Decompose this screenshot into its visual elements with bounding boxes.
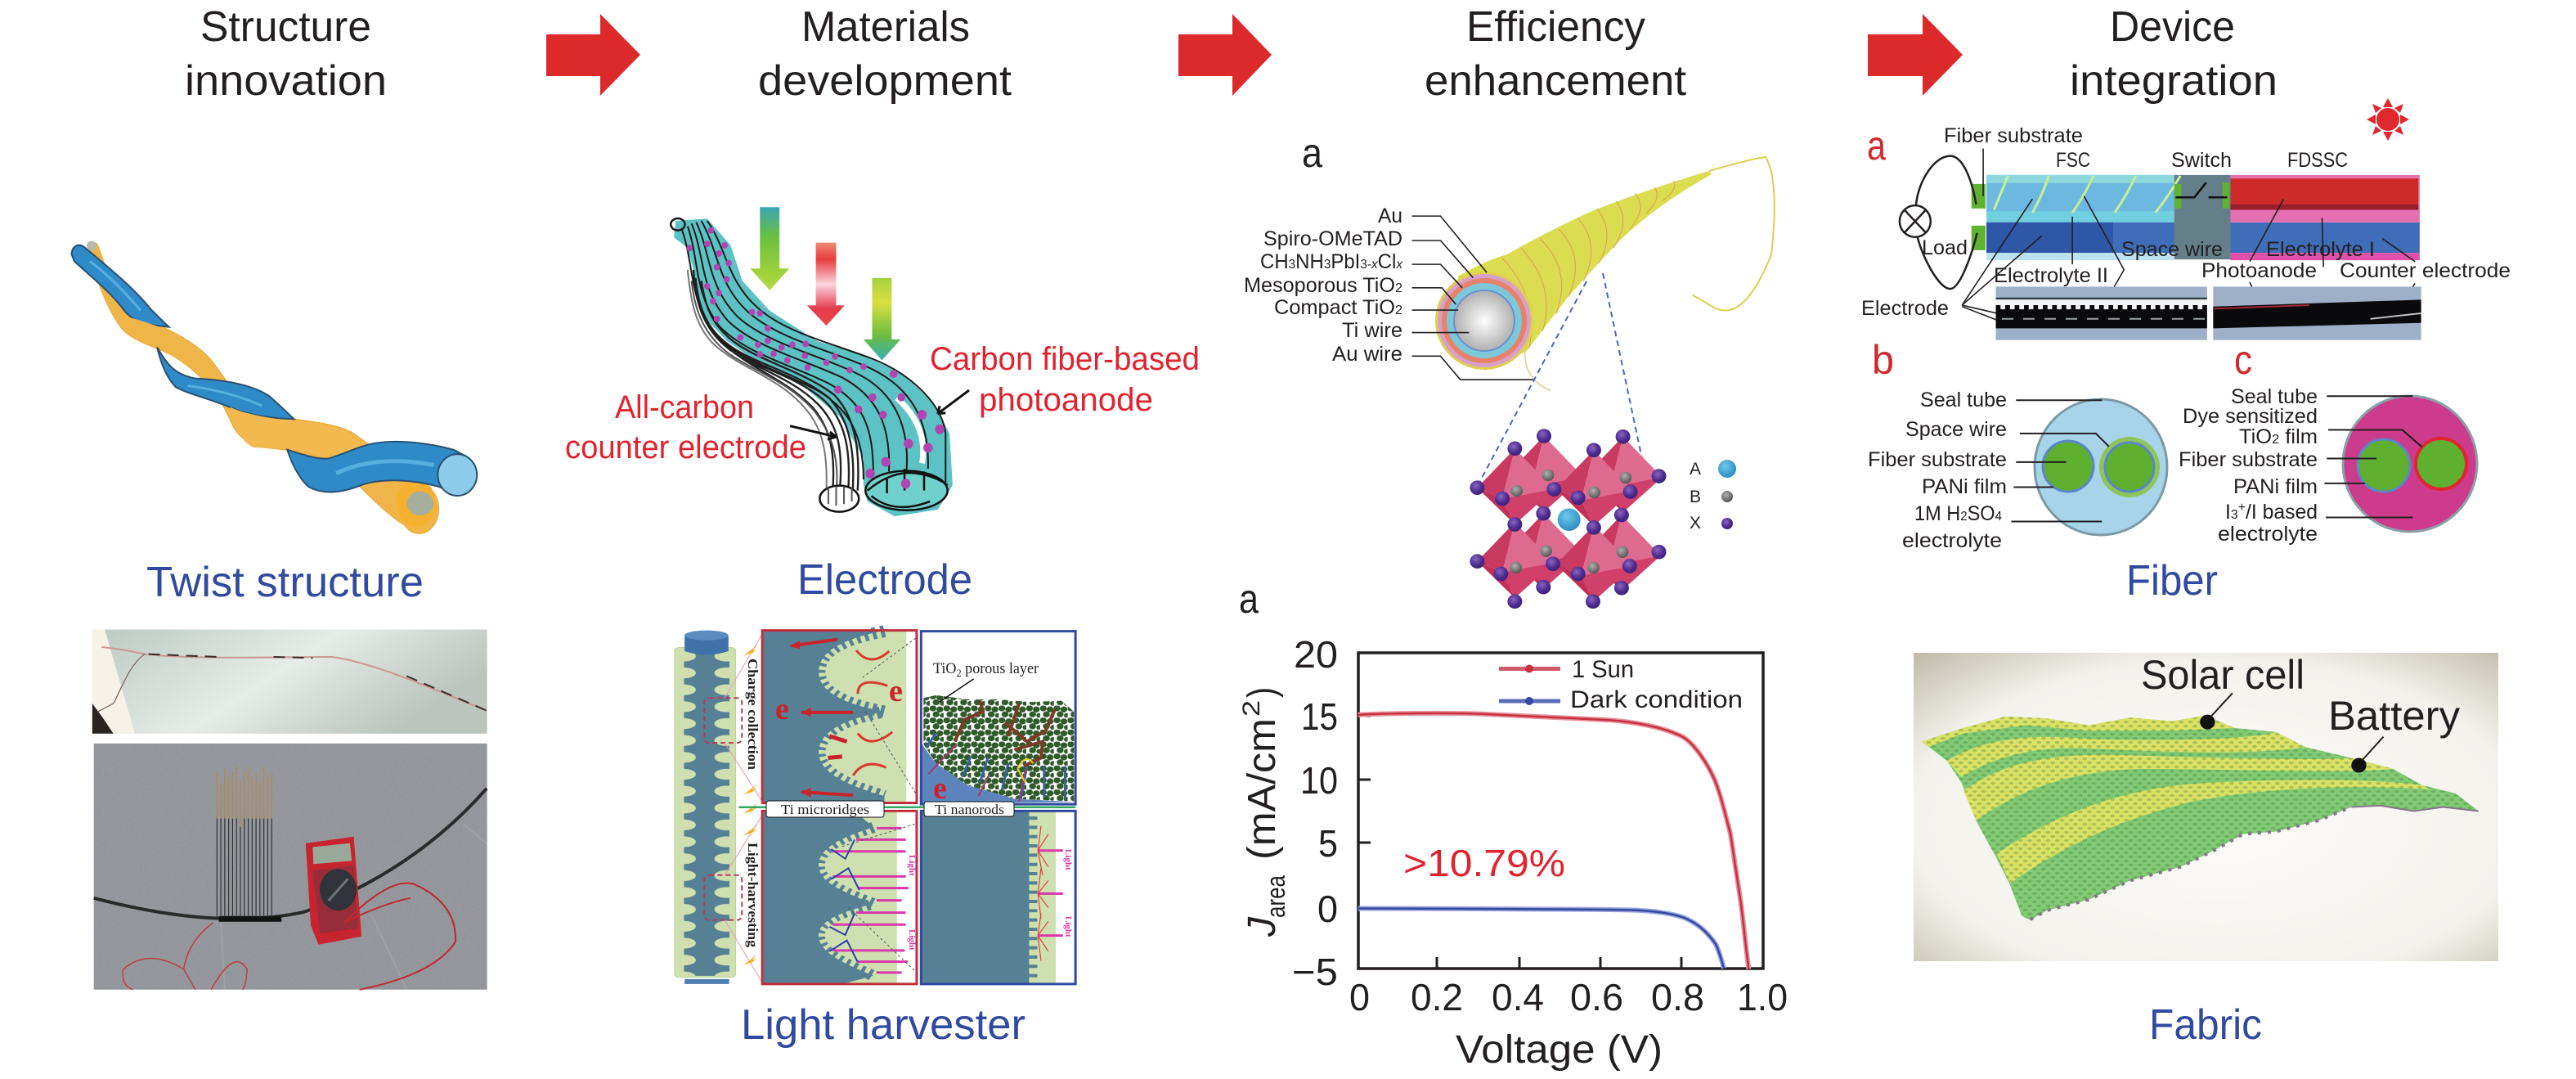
- heading: Efficiency enhancement: enhancement: [1425, 57, 1687, 105]
- labels: fiber layers: Au wire: [1332, 343, 1402, 366]
- illustration: carbon fiber electrode: [671, 207, 969, 516]
- inset: TiO2 porous layer at nanorods: [921, 632, 1075, 804]
- icon: green light arrow: [750, 207, 789, 290]
- label: Charge collection: Charge collection: [745, 659, 761, 771]
- x axis tick labels: 0.2: [1411, 976, 1463, 1018]
- light labels: Light: [1063, 849, 1073, 870]
- x axis tick labels: 0.6: [1570, 976, 1623, 1018]
- icon: switch: [2175, 182, 2228, 197]
- legend: crystal sites: B: [1690, 488, 1701, 506]
- callout: All-carbon counter electrode: [565, 389, 806, 465]
- label: Light harvester: Light harvester: [741, 1001, 1025, 1049]
- efficiency callout: >10.79%: [1403, 842, 1565, 884]
- callout: Carbon fiber-based photoanode: Carbon fiber-based: [930, 341, 1200, 377]
- electron labels: [775, 674, 947, 806]
- panel: perovskite fiber: [1244, 130, 1775, 609]
- label box: Ti microridges: Ti microridges: [781, 802, 869, 817]
- label: Fiber: Fiber: [2126, 557, 2218, 605]
- photo: FSC fiber: [1996, 286, 2207, 340]
- curve: dark condition: [1358, 908, 1724, 969]
- panel: fiber device: [1861, 98, 2511, 605]
- y axis title: [1238, 687, 1290, 937]
- label: Twist structure: Twist structure: [146, 559, 424, 606]
- labels: device parts: Electrolyte I: [2266, 238, 2375, 261]
- labels: device parts: FSC: [2056, 149, 2090, 172]
- y axis tick labels: 10: [1300, 759, 1338, 802]
- panel c: FDSSC cross-section: Seal tube: [2231, 385, 2318, 408]
- labels: fiber layers: Mesoporous TiO2: [1244, 274, 1402, 297]
- heading: Structure innovation: [185, 3, 387, 105]
- legend: Dark condition: [1499, 686, 1743, 713]
- x axis title: Voltage (V): [1456, 1028, 1663, 1072]
- photo: fiber array with multimeter: [94, 744, 487, 990]
- labels: fiber layers: Au: [1378, 205, 1402, 227]
- panel c: FDSSC cross-section: PANi film: [2233, 475, 2318, 498]
- panel b: FSC cross-section: Seal tube: [1920, 389, 2007, 411]
- labels: device parts: Load: [1922, 236, 1968, 259]
- heading: Materials development: Materials: [801, 3, 970, 51]
- heading: Device integration: Device: [2110, 3, 2235, 51]
- panel c: FDSSC cross-section: c: [2234, 337, 2252, 383]
- legend: crystal sites: [1690, 460, 1736, 533]
- panel b: FSC cross-section: Fiber substrate: [1868, 448, 2007, 471]
- photo: FDSSC fiber: [2213, 286, 2421, 340]
- labels: device parts: FDSSC: [2287, 149, 2348, 172]
- y axis tick labels: 0: [1317, 888, 1338, 930]
- y axis tick labels: 5: [1318, 822, 1338, 865]
- illustration: FSC and FDSSC integrated device: [1900, 149, 2421, 340]
- heading: Efficiency enhancement: Efficiency: [1466, 3, 1645, 51]
- y axis title: (mA/cm: [1241, 718, 1284, 860]
- panel b: FSC cross-section: Space wire: [1905, 418, 2007, 441]
- load circuit with lamp: [1900, 156, 1977, 289]
- panel b: FSC cross-section: 1M H2SO4: [1914, 502, 2002, 525]
- labels: fiber layers: Ti wire: [1342, 319, 1402, 342]
- arrow: materials to efficiency: [1178, 14, 1272, 96]
- panel letter a: a: [1239, 576, 1259, 622]
- legend: Dark condition: Dark condition: [1570, 686, 1743, 713]
- heading: Structure innovation: Structure: [200, 3, 371, 51]
- y axis title: 2: [1238, 700, 1265, 717]
- label: TiO2 porous layer: porous layer: [962, 660, 1039, 677]
- legend: 1 Sun: 1 Sun: [1572, 656, 1634, 683]
- curve: 1 Sun: [1358, 713, 1748, 969]
- chart frame and ticks: [1358, 653, 1763, 969]
- electron labels: e: [889, 674, 903, 708]
- y axis tick labels: 20: [1294, 633, 1338, 676]
- labels: fiber layers: Spiro-OMeTAD: [1263, 227, 1402, 250]
- inset: light harvesting at microridges: [762, 811, 917, 984]
- x axis tick labels: 0.4: [1492, 976, 1544, 1018]
- heading: Device integration: integration: [2070, 57, 2278, 105]
- panel: fabric: [1914, 652, 2498, 1049]
- illustration: woven fabric with stripes: [1922, 693, 2479, 920]
- light labels: Light: [907, 855, 917, 876]
- panel c: FDSSC cross-section: [2179, 337, 2477, 546]
- arrow: efficiency to device: [1868, 14, 1963, 96]
- panel b: FSC cross-section: b: [1872, 337, 1894, 383]
- panel background: [1914, 653, 2498, 961]
- heading: Efficiency enhancement: [1425, 3, 1687, 105]
- labels: device parts: Space wire: [2121, 238, 2223, 261]
- panel c: FDSSC cross-section: /I based: [2246, 501, 2318, 524]
- arrow: structure to materials: [546, 14, 640, 96]
- panel c: FDSSC cross-section: Fiber substrate: [2179, 448, 2318, 471]
- arrow: photoanode pointer: [938, 390, 969, 414]
- y axis tick labels: 15: [1301, 695, 1338, 738]
- x axis tick labels: 0.8: [1651, 976, 1704, 1018]
- labels: device parts: Electrode: [1861, 297, 1949, 320]
- panel c: FDSSC cross-section: electrolyte: [2218, 523, 2318, 546]
- y axis tick labels: [1292, 633, 1338, 993]
- inset: light harvesting at nanorods: [921, 811, 1075, 984]
- panel b: FSC cross-section: PANi film: [1922, 475, 2007, 498]
- panel c: FDSSC cross-section: +: [2238, 501, 2246, 515]
- electron labels: e: [933, 771, 947, 806]
- panel c: FDSSC cross-section: I3: [2225, 501, 2238, 524]
- callout: Solar cell: Solar cell: [2141, 652, 2304, 698]
- heading: Device integration: [2070, 3, 2278, 105]
- panel b: FSC cross-section: electrolyte: [1902, 529, 2002, 552]
- label: TiO2 porous layer: 2: [956, 667, 962, 679]
- label box: Ti microridges: [766, 801, 884, 817]
- callout: Battery: Battery: [2328, 693, 2460, 739]
- panel: light harvester: [675, 631, 1075, 1049]
- light labels: Light: [907, 929, 917, 951]
- label: Electrode: Electrode: [797, 556, 972, 604]
- label box: Ti nanorods: Ti nanorods: [935, 802, 1004, 817]
- y axis title: J: [1241, 916, 1284, 937]
- x axis tick labels: 1.0: [1737, 976, 1788, 1018]
- callout: Carbon fiber-based photoanode: photoanode: [979, 382, 1153, 418]
- callout: All-carbon counter electrode: All-carbon: [615, 389, 754, 425]
- legend: 1 Sun: [1499, 656, 1634, 683]
- x axis tick labels: 0: [1349, 976, 1370, 1018]
- panel c: FDSSC cross-section: Dye sensitized: [2183, 405, 2318, 428]
- labels: device parts: Counter electrode: [2340, 259, 2511, 282]
- illustration: coaxial fiber tube: [1458, 157, 1775, 390]
- icon: yellow-green light arrow: [864, 278, 900, 360]
- callout: Carbon fiber-based photoanode: [930, 341, 1200, 418]
- legend: crystal sites: X: [1690, 514, 1701, 533]
- light labels: Light: [1063, 916, 1073, 937]
- leader lines: [1962, 149, 2415, 320]
- panel letter a: a: [1302, 130, 1322, 176]
- panel: twist structure: [71, 241, 487, 990]
- heading: Materials development: [758, 3, 1012, 105]
- light labels: [907, 849, 1073, 951]
- labels: fiber layers: CH3NH3PbI3-xClx: [1260, 250, 1403, 273]
- illustration: microridge fiber diagram: [675, 631, 1075, 984]
- labels: device parts: Photoanode: [2201, 259, 2317, 282]
- labels: device parts: Electrolyte II: [1994, 264, 2108, 287]
- heading: Structure innovation: innovation: [185, 57, 387, 105]
- illustration: fiber cross-section rings: [1435, 272, 1533, 370]
- y axis title: area: [1261, 875, 1290, 918]
- panel: electrode: [565, 207, 1200, 604]
- heading: Materials development: development: [758, 57, 1012, 105]
- electron labels: e: [775, 692, 789, 726]
- panel b: FSC cross-section: [1868, 337, 2167, 552]
- panel c: FDSSC cross-section: TiO2 film: [2239, 425, 2318, 448]
- x axis tick labels: [1349, 976, 1788, 1018]
- label: Light-harvesting: Light-harvesting: [745, 843, 761, 948]
- legend: crystal sites: A: [1690, 460, 1701, 479]
- callout: All-carbon counter electrode: counter electrode: [565, 429, 806, 465]
- labels: fiber layers: [1244, 205, 1403, 366]
- inset: charge collection at microridges: [762, 631, 917, 803]
- panel: J-V curve chart: [1238, 576, 1788, 1072]
- labels: device parts: Switch: [2171, 149, 2232, 172]
- panel letter a: a: [1867, 123, 1886, 169]
- dashed zoom lines: [1480, 273, 1648, 486]
- icon: sun: [2367, 98, 2409, 141]
- labels: device parts: Fiber substrate: [1944, 124, 2083, 147]
- label: TiO2 porous layer: TiO: [933, 660, 958, 677]
- icon: red light arrow: [807, 243, 845, 326]
- labels: fiber layers: Compact TiO2: [1274, 296, 1402, 319]
- leader lines: fiber layers: [1411, 216, 1533, 380]
- labels: device parts: [1861, 124, 2511, 320]
- illustration: twisted fiber cable: [71, 241, 477, 533]
- illustration: perovskite crystal: [1470, 429, 1667, 609]
- arrow: counter electrode pointer: [790, 426, 836, 439]
- y axis title: ): [1241, 687, 1284, 698]
- y axis tick labels: −5: [1292, 951, 1338, 993]
- label: Fabric: Fabric: [2149, 1001, 2262, 1049]
- photo: long twisted fiber: [92, 630, 487, 734]
